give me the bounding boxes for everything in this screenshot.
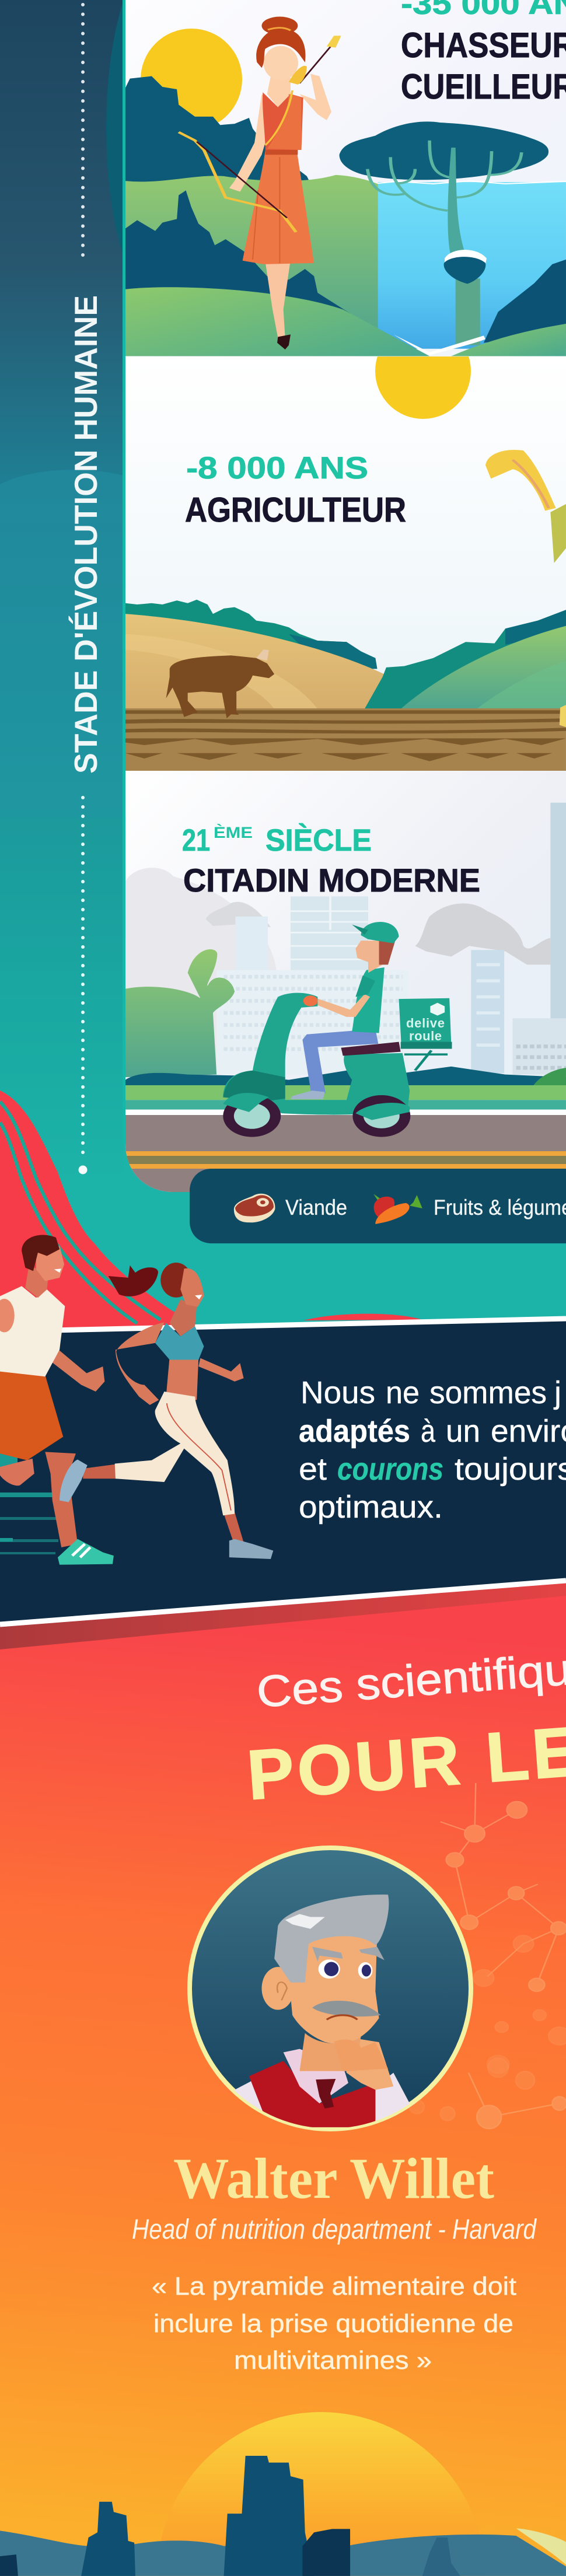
text: nous ne sommes: toujours [455,1452,566,1487]
text: nous ne sommes: et [299,1452,327,1487]
text: delive roule [406,1016,445,1043]
text: nous ne sommes: j [553,1375,561,1410]
text: citadin moderne: CITADIN MODERNE [183,862,480,899]
vertical dots top [81,5,85,261]
text: nous ne sommes: adaptés [299,1414,410,1449]
molecules [410,1783,566,2128]
figure: female runner [60,1263,273,1559]
figure: male runner [0,1235,114,1565]
panel: scientists background [0,1581,566,2576]
text: quote: « La pyramide alimentaire doit [152,2272,516,2301]
speed lines [0,1341,58,1554]
text: nous ne sommes: optimaux. [299,1490,443,1525]
figure: scooter rider [223,922,452,1137]
text: -8 000 ans: -8 000 ANS [186,451,368,485]
scene: fields [125,600,566,773]
icon: setting sun [157,2412,485,2576]
text: quote [152,2272,516,2375]
figure: woman with bow [179,17,341,349]
text: delive roule: roule [409,1029,442,1043]
teal background [0,1109,566,1342]
text: eme superscript: ÈME [214,823,253,841]
text: agriculteur: AGRICULTEUR [185,491,406,529]
panel: citadin moderne [125,771,566,1197]
text: nous ne sommes: à [421,1414,436,1449]
heading: stade d'evolution humaine: STADE D'ÉVOLUTION HUMAINE [68,295,104,774]
portrait: walter willet [190,1848,471,2129]
text: viande: Viande [285,1196,347,1219]
icon: fruit and carrot [373,1194,422,1224]
text: quote: inclure la prise quotidienne de [153,2309,513,2338]
text: nous ne sommes: un [446,1414,480,1449]
text: 21: 21 [182,823,210,858]
scene: landscape [125,76,566,356]
text: nous ne sommes [299,1375,566,1525]
icon: sun [375,356,471,419]
text: nous ne sommes: sommes [429,1375,547,1410]
text: nous ne sommes: courons [337,1452,443,1487]
figure: cow [166,649,274,718]
figure: upper body [231,2039,411,2127]
icon: tree [339,121,548,284]
text: siecle: SIÈCLE [265,823,372,858]
vertical dots bottom [78,798,88,1174]
icon: steak [234,1194,275,1222]
white band edge [0,1581,566,1624]
panel: agriculteur [125,323,566,773]
text: quote: multivitamines » [234,2346,432,2375]
figure: head [261,1895,389,2071]
road [125,1115,566,1194]
scene: city [125,803,566,1115]
heading: ces scientifiques: Ces scientifiqu [255,1645,566,1717]
text: nous ne sommes: Nous [301,1375,375,1410]
panel: chasseur cueilleur [125,0,566,356]
icon: sun [141,29,242,130]
scene: skyline [0,2456,566,2576]
figure: farmer wheat [485,450,566,727]
dark red band [0,1583,566,1649]
text: walter willet: Walter Willet [173,2146,494,2211]
text: delive roule: delive [406,1016,445,1030]
legend box [190,1169,566,1243]
text: nous ne sommes: ne [386,1375,420,1410]
red swoosh [0,1090,422,1336]
panel: left column [0,0,125,1202]
panel: dark runners band [0,1319,566,1626]
